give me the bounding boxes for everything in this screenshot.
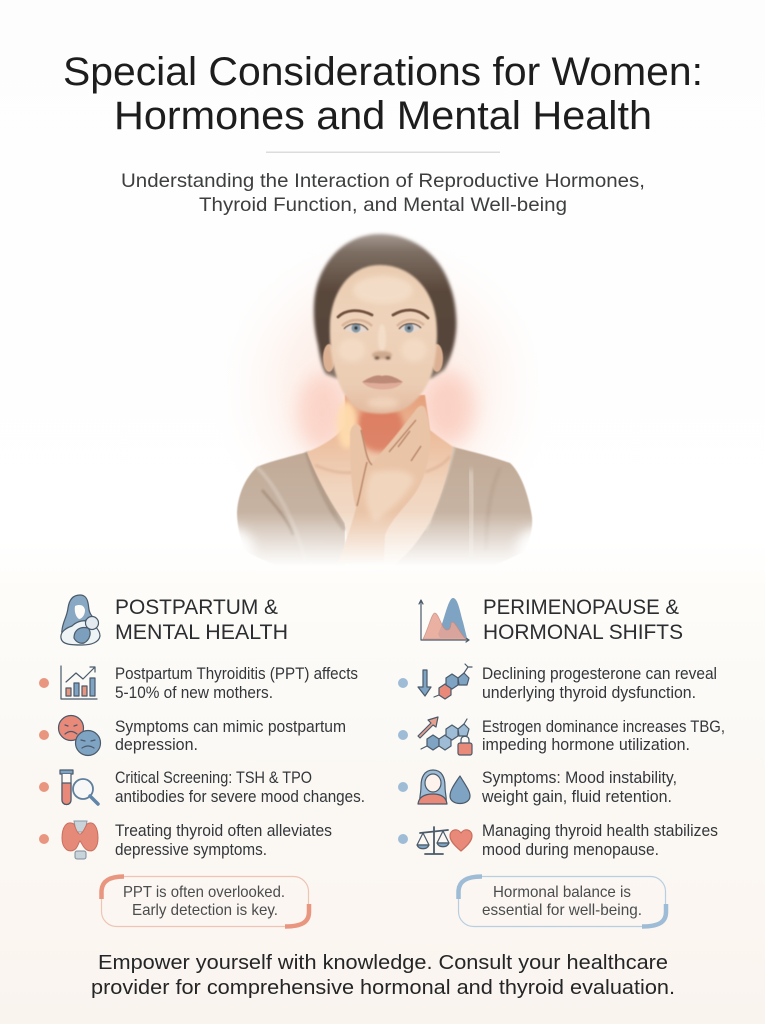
heading: POSTPARTUM & xyxy=(115,595,278,619)
item: declining progesterone: Declining progesterone can reveal xyxy=(482,664,717,683)
hair back xyxy=(314,234,456,378)
icon: down arrow and molecule xyxy=(418,664,472,699)
item: symptoms xyxy=(398,768,677,806)
shirt folds xyxy=(256,448,494,542)
facial highlights xyxy=(338,276,427,409)
item: PPT prevalence xyxy=(39,664,358,702)
lips xyxy=(362,375,403,390)
thyroid glow xyxy=(298,372,474,450)
illustration: woman touching her thyroid with glowing neck xyxy=(236,232,533,561)
callout: hormonal balance xyxy=(458,876,666,926)
title: Hormones and Mental Health xyxy=(114,94,652,138)
callout: hormonal balance: essential for well-being. xyxy=(482,902,642,919)
subtitle xyxy=(121,170,645,216)
item: symptoms: Symptoms: Mood instability, xyxy=(482,768,677,787)
icon: rising bar chart xyxy=(61,666,97,699)
footer call to action: Empower yourself with knowledge. Consult your healthcare xyxy=(98,951,668,974)
item: managing thyroid health: Managing thyroid health stabilizes xyxy=(482,821,718,840)
icon: mother holding baby xyxy=(61,595,100,645)
face xyxy=(330,265,437,414)
thyroid redness xyxy=(356,404,404,452)
footer call to action xyxy=(91,951,675,999)
callout: PPT overlooked xyxy=(102,876,309,926)
ears xyxy=(323,344,443,372)
heading: MENTAL HEALTH xyxy=(115,620,288,644)
subtitle: Understanding the Interaction of Reproductive Hormones, xyxy=(121,170,645,192)
item: symptoms mimic depression: Symptoms can mimic postpartum xyxy=(115,717,346,736)
section: postpartum and mental health xyxy=(39,595,365,926)
item: declining progesterone xyxy=(398,664,717,702)
eyebrows xyxy=(338,310,428,318)
icon: hormone curves chart xyxy=(419,598,469,642)
callout: hormonal balance: Hormonal balance is xyxy=(493,884,631,901)
finger creases xyxy=(357,420,421,506)
item: critical screening xyxy=(39,768,365,806)
item: PPT prevalence: 5-10% of new mothers. xyxy=(115,683,273,702)
item: declining progesterone: underlying thyroid dysfunction. xyxy=(482,683,696,702)
icon: thyroid gland xyxy=(62,821,98,859)
hand highlight xyxy=(366,470,414,522)
eyes xyxy=(342,320,424,333)
icon: woman and water drop xyxy=(418,770,470,804)
icon: test tube and magnifier xyxy=(60,770,98,804)
icon: up arrow, molecule and padlock xyxy=(418,717,472,755)
neck and chest xyxy=(307,395,453,570)
section: perimenopause and hormonal shifts xyxy=(398,595,725,926)
item: treating thyroid: Treating thyroid often alleviates xyxy=(115,821,332,840)
item: PPT prevalence: Postpartum Thyroiditis (PPT) affects xyxy=(115,664,358,683)
callout: PPT overlooked: Early detection is key. xyxy=(132,902,278,919)
title xyxy=(63,50,703,138)
item: estrogen dominance xyxy=(398,717,725,755)
icon: sad faces xyxy=(58,716,100,756)
item: critical screening: antibodies for severe mood changes. xyxy=(115,787,365,806)
item: symptoms mimic depression xyxy=(39,716,346,756)
item: managing thyroid health xyxy=(398,821,718,859)
item: treating thyroid xyxy=(39,821,332,859)
title: Special Considerations for Women: xyxy=(63,50,703,94)
nose xyxy=(372,351,392,359)
callout: PPT overlooked: PPT is often overlooked. xyxy=(123,884,285,901)
heading xyxy=(483,595,683,644)
icon: balance scale and heart xyxy=(417,827,472,854)
halo behind figure xyxy=(203,220,563,560)
item: critical screening: Critical Screening: TSH & TPO xyxy=(115,768,312,787)
heading: PERIMENOPAUSE & xyxy=(483,595,679,619)
heading xyxy=(115,595,288,644)
item: symptoms: weight gain, fluid retention. xyxy=(481,787,672,806)
item: treating thyroid: depressive symptoms. xyxy=(115,840,267,859)
shirt xyxy=(237,447,532,572)
subtitle: Thyroid Function, and Mental Well-being xyxy=(199,194,567,216)
item: managing thyroid health: mood during menopause. xyxy=(482,840,659,859)
footer call to action: provider for comprehensive hormonal and thyroid evaluation. xyxy=(91,976,675,999)
item: symptoms mimic depression: depression. xyxy=(115,735,198,754)
collarbone shading xyxy=(315,456,450,473)
item: estrogen dominance: impeding hormone utilization. xyxy=(482,735,690,754)
item: estrogen dominance: Estrogen dominance increases TBG, xyxy=(482,717,725,736)
heading: HORMONAL SHIFTS xyxy=(483,620,683,644)
hand xyxy=(338,406,430,564)
